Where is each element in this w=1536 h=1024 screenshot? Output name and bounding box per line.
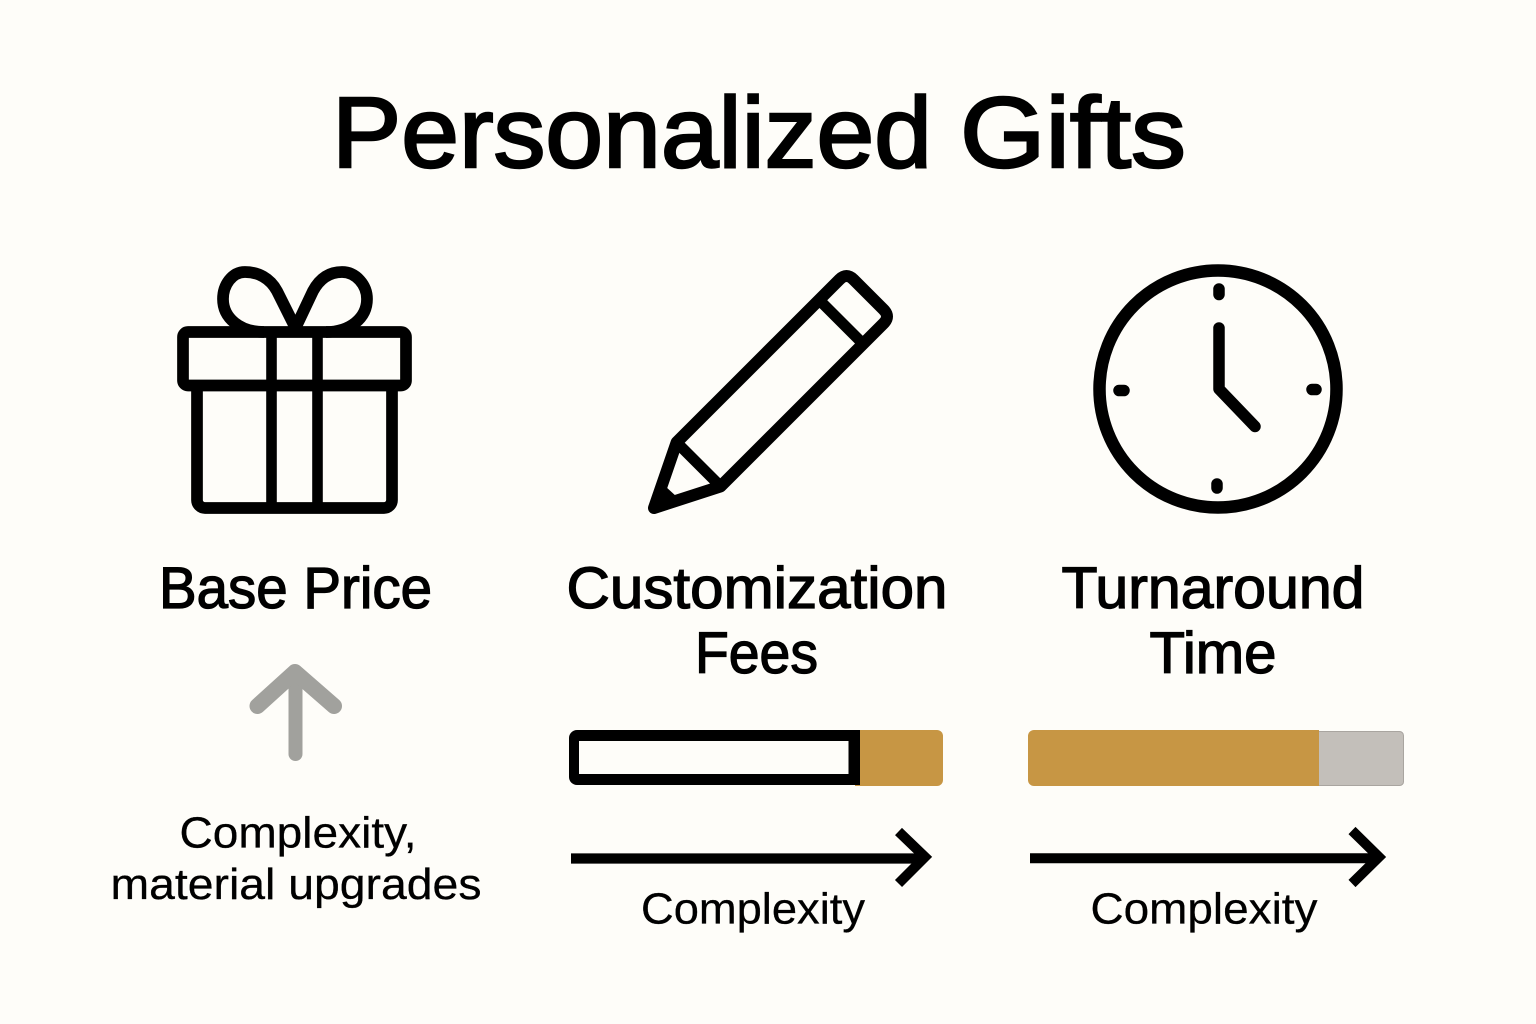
text: complexity, material upgrades [110,808,482,909]
arrow: turnaround complexity [1030,830,1379,884]
text: complexity, material upgrades: Complexity, [180,808,416,858]
label: complexity customization: Complexity [641,884,865,934]
heading: customization fees: Fees [695,621,818,686]
heading: turnaround time: Time [1150,621,1276,686]
title [332,77,1186,189]
text: complexity, material upgrades: material upgrades [110,860,482,909]
title: Gifts [960,77,1186,189]
icon: pencil [652,276,887,510]
bar: customization fees [569,730,943,786]
heading: customization fees: Customization [566,556,948,621]
label: complexity turnaround: Complexity [1090,884,1318,934]
heading: turnaround time: Turnaround [1062,556,1364,621]
heading: turnaround time [1062,556,1364,686]
heading: customization fees [566,556,948,686]
icon: clock [1100,270,1336,508]
icon: gift box [183,272,406,508]
heading: base price: Base Price [159,556,432,621]
arrow: up grey [258,672,334,754]
arrow: customization complexity [571,832,925,884]
bar: turnaround time [1028,730,1404,786]
title: Personalized [332,77,932,189]
